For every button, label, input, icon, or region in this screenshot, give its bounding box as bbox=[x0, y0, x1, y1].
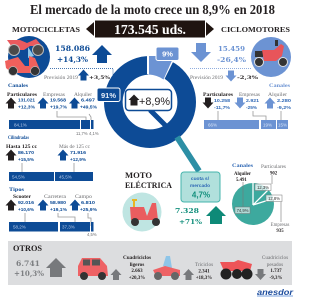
panel: canales motocicletas: Empresas bbox=[43, 92, 65, 98]
stats: cuadriciclos pesados: 1.737 bbox=[270, 269, 282, 274]
icon: electric scooter bbox=[122, 192, 162, 232]
stats: triciclos: Triciclos bbox=[195, 262, 213, 268]
total banner bbox=[86, 20, 214, 38]
heading: ciclomotores: CICLOMOTORES bbox=[221, 25, 290, 34]
stats: previsión motocicletas: Previsión 2019 bbox=[44, 76, 79, 81]
pie chart: canales moto eléctrica: 74,9% bbox=[237, 208, 249, 213]
stats: otros total: 6.741 bbox=[16, 259, 40, 268]
label: 9% bbox=[156, 47, 179, 60]
stats: ciclomotores total: 15.459 bbox=[218, 45, 245, 53]
panel: tipos: Carretera bbox=[44, 194, 67, 200]
heading: motocicletas: MOTOCICLETAS bbox=[12, 25, 80, 34]
stats: ciclomotores total bbox=[217, 45, 247, 64]
panel: tipos: 58.980 bbox=[50, 200, 66, 206]
panel: tipos: Scooter bbox=[13, 194, 32, 200]
stats: cuadriciclos ligeros: Cuadriciclos bbox=[123, 255, 151, 261]
stats: cuadriciclos ligeros: +20,3% bbox=[129, 276, 145, 281]
stats: moto eléctrica: +71% bbox=[179, 218, 203, 226]
icon: trike bbox=[153, 256, 180, 280]
stats: cuadriciclos pesados: pesados bbox=[267, 262, 283, 268]
panel: canales ciclomotores bbox=[202, 83, 292, 129]
panel: canales motocicletas: 11,7% bbox=[76, 131, 88, 136]
panel: canales motocicletas: +19,7% bbox=[50, 104, 68, 110]
pie chart: canales moto eléctrica: 902 bbox=[270, 172, 278, 176]
total banner: 173.545 uds. bbox=[114, 22, 186, 37]
panel: tipos: 58,2% bbox=[13, 224, 26, 230]
stats: previsión motocicletas bbox=[44, 68, 113, 88]
stats: otros total bbox=[14, 259, 44, 278]
logo: anesdor: anesdor bbox=[257, 287, 294, 297]
panel: canales motocicletas: 6.497 bbox=[81, 98, 95, 104]
heading: moto eléctrica bbox=[125, 171, 172, 190]
stats: motocicletas total: 158.086 bbox=[55, 44, 90, 53]
callout: +8,9% bbox=[126, 90, 172, 110]
panel: tipos: Tipos bbox=[9, 187, 24, 193]
panel: tipos: +19,1% bbox=[50, 207, 68, 213]
label: 91% bbox=[97, 88, 120, 102]
stats: previsión ciclomotores: Previsión 2019 bbox=[190, 76, 224, 81]
stats: cuadriciclos pesados bbox=[262, 255, 288, 281]
panel: canales ciclomotores: -11,7% bbox=[214, 105, 231, 111]
pie chart: canales moto eléctrica: 935 bbox=[276, 229, 284, 234]
panel: canales ciclomotores: 2.921 bbox=[246, 98, 259, 104]
panel: canales motocicletas: Canales bbox=[8, 83, 28, 89]
pie chart: canales moto eléctrica: 12,3% bbox=[257, 185, 269, 190]
stats: cuadriciclos pesados: -9,3% bbox=[270, 276, 282, 281]
panel: tipos: +10,6% bbox=[18, 207, 35, 213]
panel: tipos: 6.810 bbox=[81, 200, 95, 206]
panel: cilindradas: 86.170 bbox=[18, 150, 34, 156]
stats: triciclos: +18,3% bbox=[196, 276, 212, 281]
stats: cuadriciclos ligeros: ligeros bbox=[130, 262, 144, 268]
icon: moped bbox=[251, 37, 291, 77]
panel: canales ciclomotores: -25% bbox=[246, 105, 258, 111]
arrow: moto eléctrica up bbox=[206, 206, 226, 224]
pie chart: canales moto eléctrica: Particulares bbox=[261, 165, 286, 170]
label: 9%: 9% bbox=[162, 50, 173, 58]
panel: canales motocicletas: 131.021 bbox=[18, 98, 35, 104]
panel: tipos: 92.016 bbox=[18, 200, 34, 206]
arrow: otros up bbox=[46, 258, 66, 277]
stats: motocicletas total: +14,3% bbox=[57, 55, 89, 64]
panel: tipos: +25,9% bbox=[80, 207, 98, 213]
panel: cilindradas: Hasta 125 cc bbox=[6, 144, 38, 150]
pie chart: canales moto eléctrica: Empresas bbox=[271, 223, 289, 228]
pie chart: canales moto eléctrica: Alquiler bbox=[234, 172, 252, 177]
stats: moto eléctrica: 7.328 bbox=[175, 207, 199, 215]
heading: otros: OTROS bbox=[13, 244, 43, 253]
connector: donut to cuota bbox=[177, 137, 199, 171]
callout: +8,9%: +8,9% bbox=[139, 96, 170, 108]
stats: cuadriciclos ligeros bbox=[123, 255, 151, 281]
icon: quad bbox=[220, 260, 252, 280]
panel: canales ciclomotores: Canales bbox=[269, 83, 290, 89]
panel: canales ciclomotores: Particulares bbox=[203, 92, 233, 98]
panel: otros bbox=[8, 241, 292, 285]
stats: triciclos bbox=[195, 262, 213, 281]
panel: canales motocicletas: 19.568 bbox=[50, 98, 66, 104]
arrow: motocicletas up bbox=[92, 45, 112, 63]
pie chart: canales moto eléctrica: Canales bbox=[232, 163, 253, 169]
panel: canales ciclomotores: Empresas bbox=[239, 92, 260, 98]
panel: cilindradas: Cilindradas bbox=[8, 135, 29, 141]
panel: canales motocicletas bbox=[6, 83, 99, 136]
pie chart: canales moto eléctrica bbox=[232, 163, 289, 234]
callout: cuota de mercado: cuota s/ bbox=[191, 176, 210, 182]
panel: canales motocicletas: Alquiler bbox=[74, 92, 92, 98]
panel: cilindradas: 45,5% bbox=[59, 174, 72, 180]
stats: otros total: +10,3% bbox=[14, 269, 44, 278]
callout: cuota de mercado: mercado bbox=[190, 183, 210, 189]
panel: canales ciclomotores: 19% bbox=[263, 122, 272, 128]
panel: tipos bbox=[6, 187, 98, 237]
stats: previsión motocicletas: +3,5% bbox=[89, 75, 110, 81]
panel: canales ciclomotores: 2.280 bbox=[277, 98, 291, 104]
panel: cilindradas: +12,9% bbox=[70, 157, 87, 163]
panel: canales ciclomotores: -9,2% bbox=[277, 105, 292, 111]
stats: cuadriciclos pesados: Cuadriciclos bbox=[262, 255, 288, 261]
stats: motocicletas total bbox=[55, 44, 90, 64]
panel: canales ciclomotores: 10.258 bbox=[214, 98, 230, 104]
panel: tipos: 4,5% bbox=[87, 232, 97, 237]
panel: canales ciclomotores: 66% bbox=[208, 122, 217, 128]
panel: tipos: 37,3% bbox=[62, 224, 75, 230]
icon: motorcycles bbox=[5, 36, 50, 78]
heading: moto eléctrica: ELÉCTRICA bbox=[125, 180, 172, 190]
panel: cilindradas: 54,5% bbox=[12, 174, 25, 180]
arrow: ciclomotores down bbox=[191, 43, 211, 62]
panel: canales motocicletas: 4,1% bbox=[89, 131, 99, 136]
stats: triciclos: 2.341 bbox=[198, 270, 210, 274]
icon: car bbox=[78, 258, 108, 280]
arrow: cuadriciclos pesados down bbox=[255, 269, 266, 280]
panel: tipos: Campo bbox=[75, 194, 92, 200]
panel: canales ciclomotores: 15% bbox=[278, 122, 287, 128]
pie chart: canales moto eléctrica: 5.491 bbox=[236, 178, 247, 183]
panel: cilindradas bbox=[6, 135, 93, 181]
donut chart bbox=[113, 54, 187, 139]
panel: cilindradas: +15,5% bbox=[18, 157, 35, 163]
panel: cilindradas: 71.916 bbox=[70, 150, 86, 156]
title: El mercado de la moto crece un 8,9% en 2018 bbox=[30, 2, 275, 17]
panel: canales ciclomotores: Alquiler bbox=[268, 92, 287, 98]
panel: canales motocicletas: +49,5% bbox=[80, 104, 98, 110]
stats: previsión ciclomotores: -2,3% bbox=[237, 75, 258, 81]
callout: cuota de mercado bbox=[181, 172, 220, 202]
stats: moto eléctrica bbox=[175, 207, 203, 226]
stats: cuadriciclos ligeros: 2.663 bbox=[131, 269, 143, 274]
panel: canales motocicletas: Particulares bbox=[7, 92, 37, 98]
stats: ciclomotores total: -26,4% bbox=[217, 56, 247, 64]
arrow: triciclos up bbox=[183, 269, 194, 280]
arrow: cuadriciclos ligeros up bbox=[110, 269, 122, 280]
callout: cuota de mercado: 4,7% bbox=[192, 190, 210, 200]
stats: previsión ciclomotores bbox=[190, 68, 258, 82]
panel: canales motocicletas: 84,1% bbox=[14, 122, 27, 128]
pie chart: canales moto eléctrica: 12,8% bbox=[268, 196, 280, 201]
heading: moto eléctrica: MOTO bbox=[125, 171, 152, 180]
label: 91%: 91% bbox=[101, 91, 116, 100]
panel: canales motocicletas: +12,3% bbox=[18, 104, 36, 110]
panel: cilindradas: Más de 125 cc bbox=[59, 144, 91, 150]
